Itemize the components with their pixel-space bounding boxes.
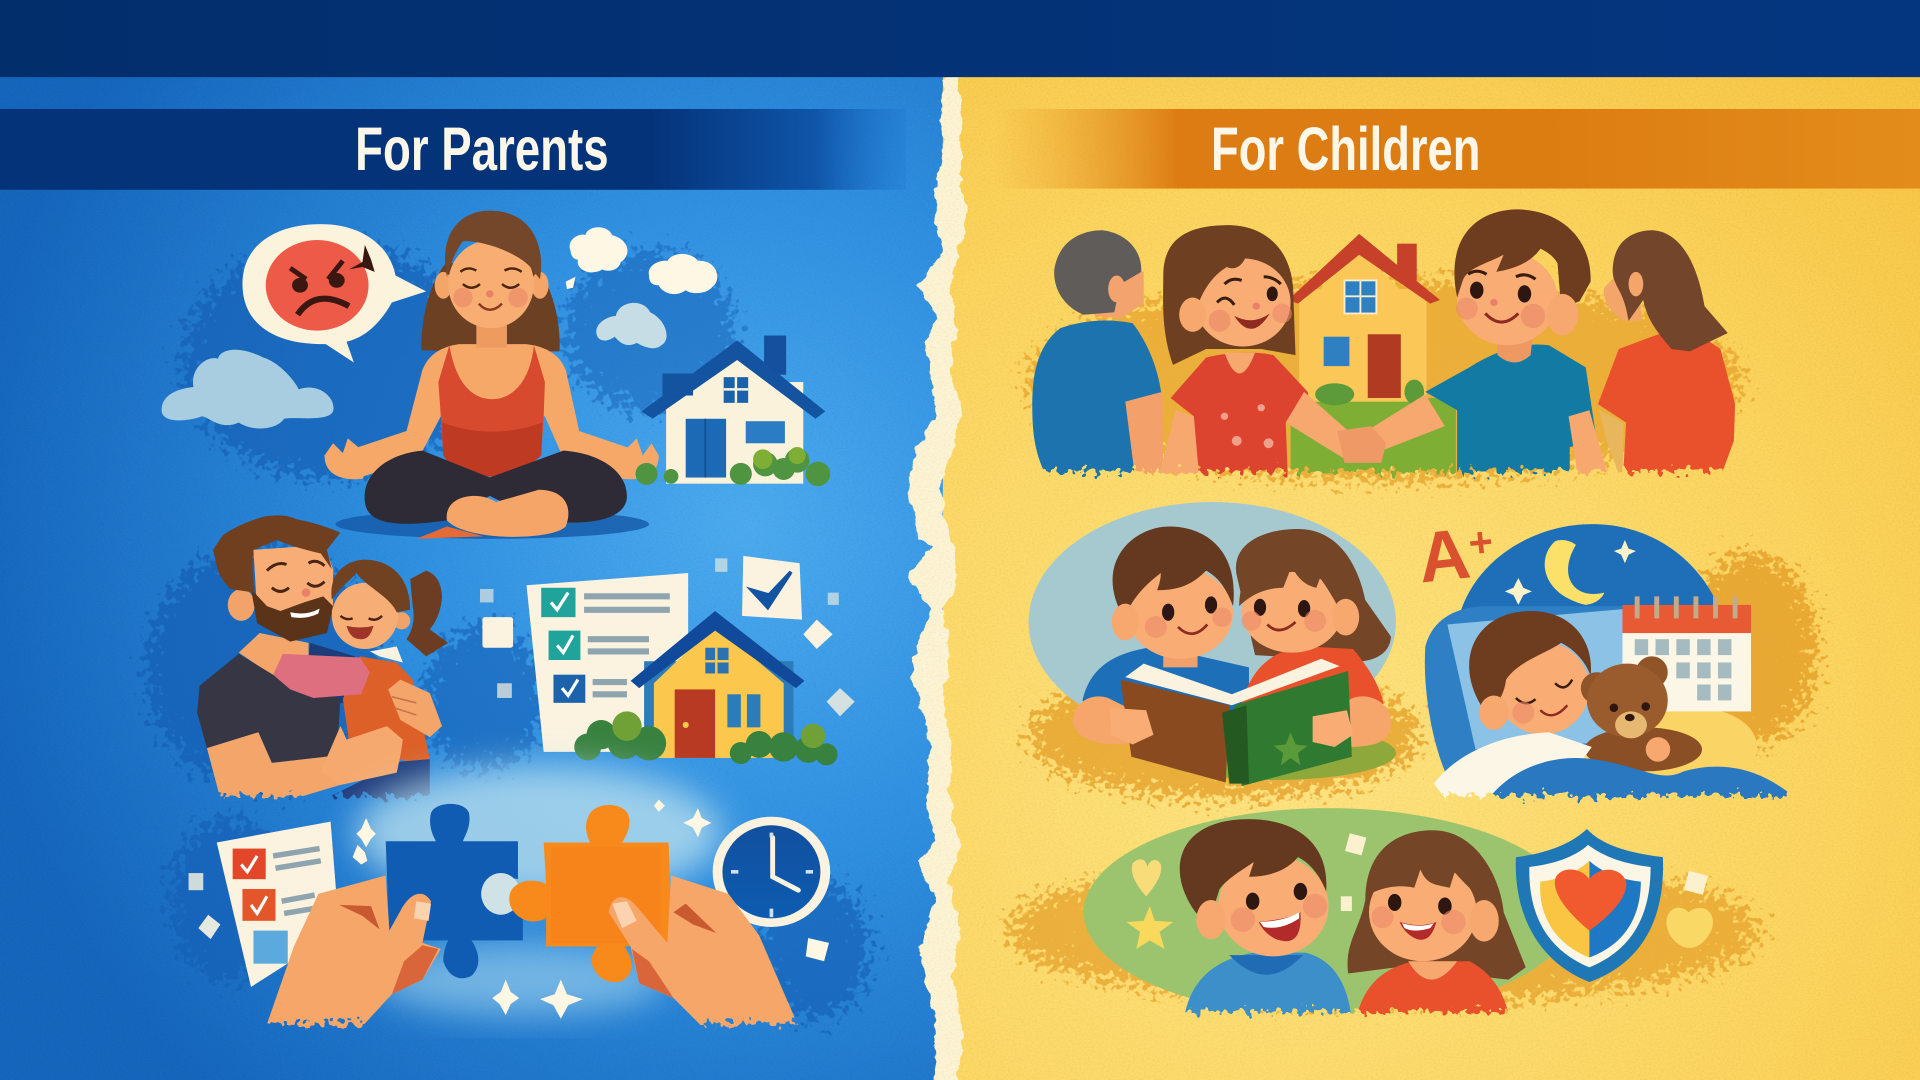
parent with long hair xyxy=(1598,230,1735,487)
scene: father hugging daughter xyxy=(141,515,855,808)
sparkles xyxy=(189,800,829,1019)
speech bubble with angry face xyxy=(242,224,426,362)
scene: sleeping child xyxy=(1425,524,1822,814)
checklist paper xyxy=(217,822,339,987)
checklist paper xyxy=(527,573,688,752)
calendar xyxy=(1622,596,1751,711)
panel: children yellow background xyxy=(943,73,1920,1080)
heading: For Children: For Children xyxy=(1211,115,1480,183)
scene: children holding hands with family xyxy=(1016,209,1751,487)
fists on the book xyxy=(1109,708,1353,747)
scene: meditating parent xyxy=(162,211,830,539)
pale cloud xyxy=(162,350,334,428)
heading: For Parents: For Parents xyxy=(355,115,609,183)
yellow house xyxy=(574,611,838,765)
bed and pillow xyxy=(1425,606,1635,771)
heading: For Parents xyxy=(0,109,906,190)
boy in teal shirt xyxy=(1372,209,1608,480)
panel: parents blue background xyxy=(0,73,967,1080)
woman xyxy=(324,211,659,539)
heading: For Children xyxy=(994,109,1920,189)
grade: A+: A xyxy=(1414,514,1474,598)
grade: A+: + xyxy=(1466,517,1495,567)
clasped hands xyxy=(1337,426,1386,463)
sleeping child xyxy=(1469,611,1591,735)
sparkle squares xyxy=(1341,833,1708,911)
torn paper divider xyxy=(906,76,967,1080)
boy laughing xyxy=(1180,819,1352,1031)
girl smiling xyxy=(1348,830,1526,1031)
night sky dome xyxy=(1457,524,1720,637)
right hand xyxy=(609,876,802,1041)
pale heart xyxy=(1666,908,1713,948)
scene: reading together xyxy=(1016,502,1433,802)
orange puzzle piece xyxy=(509,805,672,982)
small clouds xyxy=(566,227,717,348)
scene: happy children with shield xyxy=(992,808,1776,1031)
left hand xyxy=(263,876,441,1041)
children figures xyxy=(1180,819,1526,1031)
white house xyxy=(636,336,830,486)
check card xyxy=(742,556,802,620)
blue puzzle piece xyxy=(386,804,523,978)
scene: puzzle pieces held by two hands xyxy=(165,765,876,1041)
arms xyxy=(1073,696,1149,744)
open book xyxy=(1120,659,1352,786)
top navy band xyxy=(0,0,1920,77)
floating confetti squares xyxy=(480,558,855,716)
girl reading xyxy=(1236,529,1391,710)
clock xyxy=(713,817,830,927)
boy reading xyxy=(1082,527,1249,713)
grey-haired parent xyxy=(1032,230,1163,487)
daughter xyxy=(273,560,448,808)
blanket xyxy=(1434,732,1793,814)
father xyxy=(197,515,403,808)
teddy bear xyxy=(1581,656,1702,771)
family figures xyxy=(1032,209,1735,487)
girl in red dress xyxy=(1162,225,1347,478)
house on green lawn xyxy=(1288,234,1456,487)
hug figures xyxy=(197,515,448,808)
shield with heart xyxy=(1516,829,1663,982)
father's hand xyxy=(321,726,403,785)
